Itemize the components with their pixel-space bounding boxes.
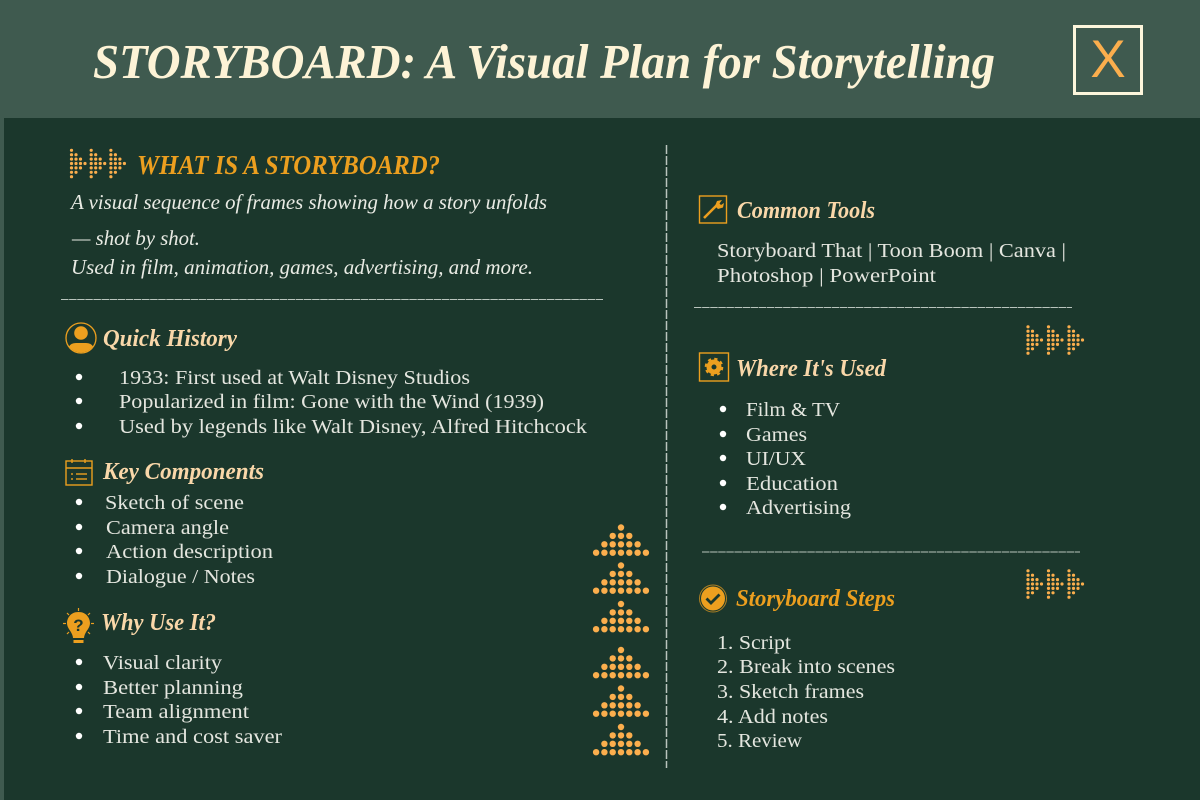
definition text: Used in film, animation, games, advertising, and more. — [71, 255, 533, 279]
vertical divider — [666, 145, 668, 768]
uses list: Games — [746, 424, 807, 446]
uses list — [720, 399, 851, 519]
steps list: 3. Sketch frames — [717, 681, 864, 703]
heading: where it's used: Where It's Used — [736, 356, 887, 382]
definition text: A visual sequence of frames showing how a story unfolds — [69, 190, 547, 214]
steps list: 1. Script — [717, 632, 791, 654]
components list: Action description — [106, 541, 273, 563]
benefits list: Time and cost saver — [103, 726, 282, 748]
components list: Sketch of scene — [105, 492, 244, 514]
icon: calendar list — [66, 459, 92, 485]
section: key components — [66, 459, 273, 588]
heading: key components: Key Components — [102, 459, 264, 485]
heading: quick history: Quick History — [103, 326, 237, 352]
definition text — [69, 190, 547, 279]
benefits list: Team alignment — [103, 701, 249, 723]
history list: 1933: First used at Walt Disney Studios — [119, 367, 470, 389]
tools text — [717, 240, 1066, 287]
icon: wrench — [700, 196, 726, 223]
section: why use it — [63, 608, 282, 748]
icon: dotted arrows — [70, 149, 126, 178]
icon: check circle — [700, 585, 726, 612]
section: storyboard steps — [700, 585, 895, 752]
components list: Camera angle — [106, 517, 229, 539]
tools text: Storyboard That | Toon Boom | Canva | — [717, 240, 1066, 262]
icon: dotted arrows right top — [1026, 325, 1084, 355]
logo: X in a square — [1074, 26, 1142, 94]
definition text: — shot by shot. — [71, 226, 200, 250]
steps list — [717, 632, 895, 752]
components list: Dialogue / Notes — [106, 566, 255, 588]
uses list: Advertising — [746, 497, 851, 519]
uses list: UI/UX — [746, 448, 806, 470]
icon: dotted arrows right bottom — [1026, 569, 1084, 599]
steps list: 2. Break into scenes — [717, 656, 895, 678]
title: STORYBOARD: A Visual Plan for Storytelling — [93, 34, 995, 89]
benefits list: Visual clarity — [103, 652, 223, 674]
steps list: 5. Review — [717, 730, 802, 752]
benefits list: Better planning — [103, 677, 243, 699]
benefits list — [76, 652, 282, 748]
icon: light bulb: ? — [73, 616, 84, 635]
section: common tools — [700, 196, 1066, 287]
uses list: Film & TV — [746, 399, 840, 421]
section: where it's used — [700, 353, 887, 519]
section: quick history — [66, 323, 588, 438]
icon: gear — [700, 353, 728, 381]
heading: storyboard steps: Storyboard Steps — [736, 586, 895, 612]
heading: what is a storyboard: WHAT IS A STORYBOARD? — [137, 150, 440, 180]
icon: person — [66, 323, 96, 353]
history list: Popularized in film: Gone with the Wind (1939) — [119, 391, 544, 413]
section: what is a storyboard — [69, 149, 547, 279]
uses list: Education — [746, 473, 838, 495]
components list — [76, 492, 273, 588]
heading: common tools: Common Tools — [737, 198, 875, 224]
history list: Used by legends like Walt Disney, Alfred Hitchcock — [119, 416, 588, 438]
decoration: dotted triangles — [593, 524, 649, 755]
logo: X in a square: X — [1090, 30, 1126, 89]
tools text: Photoshop | PowerPoint — [717, 265, 936, 287]
history list — [76, 367, 588, 438]
heading: why use it: Why Use It? — [101, 610, 216, 636]
icon: light bulb — [63, 608, 94, 643]
steps list: 4. Add notes — [717, 706, 828, 728]
